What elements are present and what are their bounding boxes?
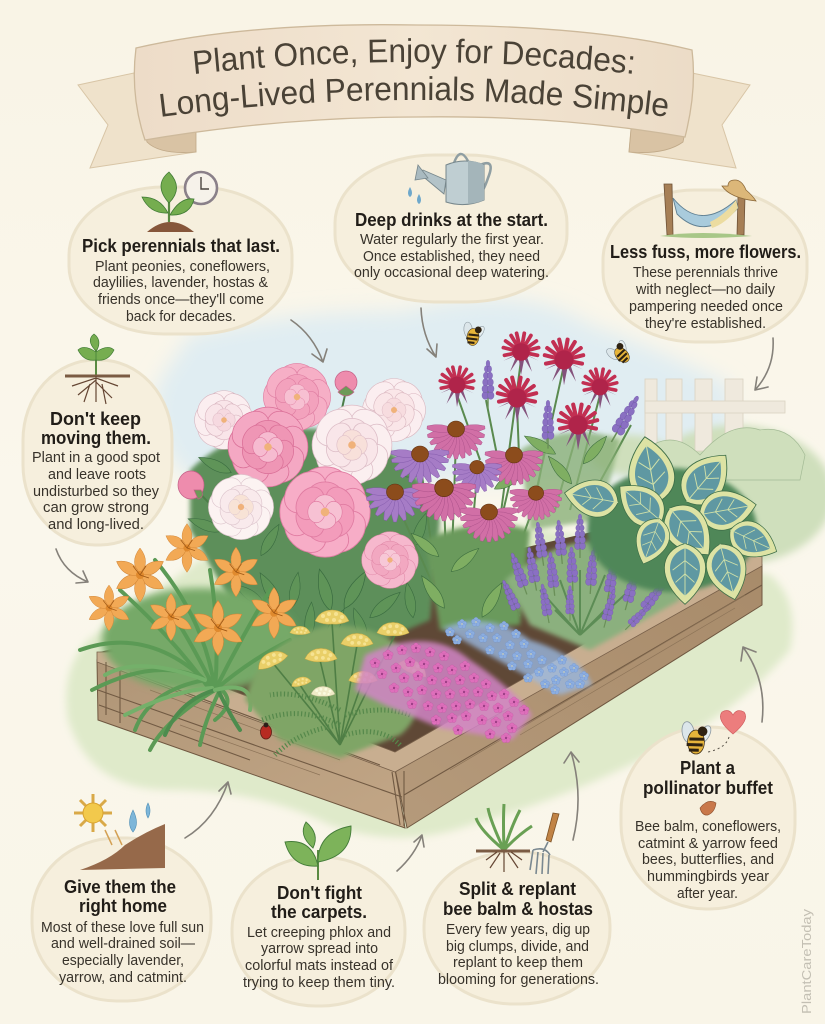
text: don't keep moving <box>32 409 160 533</box>
grass patch <box>66 520 792 838</box>
panel: pick perennials <box>69 172 292 334</box>
text: deep drinks: Once established, they need <box>363 249 540 265</box>
creeping phlox <box>355 641 532 743</box>
text: less fuss <box>610 242 801 332</box>
text: don't keep moving: and leave roots <box>48 467 146 483</box>
right plank face <box>395 565 762 828</box>
text: don't fight the carpets: colorful mats instead of <box>245 958 394 974</box>
peony buds <box>178 371 357 499</box>
ribbon folds <box>145 118 685 153</box>
text: don't fight the carpets: the carpets. <box>271 902 367 922</box>
peonies <box>178 361 428 591</box>
soil <box>100 530 760 762</box>
text: don't keep moving: moving them. <box>41 428 151 448</box>
wash: bush <box>590 425 825 565</box>
text: pollinator body: after year. <box>677 886 738 902</box>
ladybug <box>260 723 272 739</box>
text: pollinator heading: Plant a <box>680 758 736 778</box>
panel: right home <box>32 794 211 1001</box>
text: don't keep moving: undisturbed so they <box>33 484 160 500</box>
panel: split and replant <box>424 804 610 1004</box>
arrow: less fuss to hosta <box>755 338 773 390</box>
text: right home: especially lavender, <box>62 953 184 969</box>
title text <box>160 38 668 120</box>
peony foliage <box>186 395 440 650</box>
arrow: right home to bed <box>185 782 231 838</box>
text: pollinator body: Bee balm, coneflowers, <box>635 819 781 835</box>
text: don't keep moving: Don't keep <box>50 409 141 429</box>
panel: deep drinks <box>335 154 567 302</box>
text: deep drinks: Deep drinks at the start. <box>355 210 548 230</box>
text: pick perennials: Pick perennials that last. <box>82 236 280 256</box>
daylily foliage <box>80 560 298 750</box>
daylilies <box>87 524 299 656</box>
icon: small butterfly <box>700 801 716 815</box>
text: don't fight the carpets: Don't fight <box>277 883 362 903</box>
text: pollinator body <box>635 819 781 902</box>
text: pick perennials <box>82 236 280 325</box>
hosta <box>561 433 784 605</box>
arrow: carpets to bed <box>397 835 424 871</box>
coneflowers <box>366 421 562 542</box>
bee balm <box>440 333 617 450</box>
text: pick perennials: daylilies, lavender, hostas & <box>93 275 268 291</box>
arrow: pick perennials to peonies <box>291 320 327 362</box>
panel: don't keep moving <box>23 334 172 545</box>
purple catmint spikes <box>482 360 644 449</box>
text: less fuss: Less fuss, more flowers. <box>610 242 801 262</box>
text: don't fight the carpets: trying to keep them tiny. <box>243 975 395 991</box>
left plank face <box>97 660 405 828</box>
text: pick perennials: back for decades. <box>126 309 236 325</box>
icon: sun, water and soil <box>74 794 165 870</box>
text: split and replant: blooming for generations. <box>438 972 599 988</box>
text: don't keep moving: Plant in a good spot <box>32 450 160 466</box>
text: don't fight the carpets: Let creeping phlox and <box>247 925 391 941</box>
plank seams <box>98 585 762 826</box>
panel: pollinator buffet <box>621 711 795 909</box>
right ribbon tail <box>629 73 750 168</box>
text: don't fight the carpets <box>243 883 395 991</box>
text: right home: yarrow, and catmint. <box>59 970 187 986</box>
text: deep drinks: Water regularly the first year. <box>360 232 544 248</box>
text: less fuss: they're established. <box>645 316 766 332</box>
yarrow <box>254 610 430 696</box>
text: right home <box>41 877 204 986</box>
text: don't keep moving: and long-lived. <box>48 517 144 533</box>
coneflower and bee balm foliage <box>408 432 620 630</box>
lavender <box>499 514 680 650</box>
title banner <box>77 24 751 168</box>
text: deep drinks <box>354 210 549 281</box>
text: split and replant: Every few years, dig up <box>446 922 590 938</box>
watercolor sky wash <box>154 299 735 480</box>
panel: less fuss <box>603 180 807 342</box>
text: pick perennials: friends once—they'll come <box>98 292 264 308</box>
text: pollinator heading <box>643 758 773 798</box>
rim top <box>97 552 762 772</box>
title text: Long-Lived Perennials Made Simple <box>160 76 668 120</box>
arrow: pollinator to bed <box>741 647 763 722</box>
text: don't fight the carpets: yarrow spread into <box>261 941 378 957</box>
text: pollinator heading: pollinator buffet <box>643 778 773 798</box>
icon: green leaves <box>285 822 351 880</box>
left ribbon tail <box>78 73 196 168</box>
watermark: PlantCareToday <box>799 908 814 1014</box>
text: less fuss: pampering needed once <box>629 299 783 315</box>
icon: seedling with roots <box>65 334 130 404</box>
text: split and replant: big clumps, divide, and <box>446 939 589 955</box>
text: pollinator body: catmint & yarrow feed <box>638 836 778 852</box>
icon: grass clump and garden fork <box>476 804 559 874</box>
text: right home: right home <box>79 896 167 916</box>
icon: watering can <box>408 154 491 205</box>
text: split and replant: replant to keep them <box>453 955 583 971</box>
text: right home: Most of these love full sun <box>41 920 204 936</box>
text: less fuss: These perennials thrive <box>633 265 778 281</box>
arrow: don't keep moving to daylilies <box>56 549 88 583</box>
fence <box>645 379 785 451</box>
title text: Plant Once, Enjoy for Decades: <box>194 38 634 74</box>
icon: seedling and clock <box>142 172 217 232</box>
icon: hammock and hat <box>660 180 756 238</box>
text: don't keep moving: can grow strong <box>43 500 149 516</box>
text: deep drinks: only occasional deep watering. <box>354 265 549 281</box>
arrow: deep drinks to coneflowers <box>421 308 437 357</box>
creeping blue flowers <box>442 617 592 695</box>
yarrow foliage <box>245 622 425 758</box>
arrow: split and replant to bed <box>564 752 579 840</box>
raised wooden bed <box>97 530 762 828</box>
text: right home: Give them the <box>64 877 176 897</box>
text: split and replant <box>438 879 599 988</box>
bee near bee balm right <box>603 338 635 371</box>
text: pollinator body: bees, butterflies, and <box>642 852 774 868</box>
ribbon body <box>134 25 693 140</box>
bee near bee balm left <box>456 319 487 349</box>
text: less fuss: with neglect—no daily <box>635 282 776 298</box>
coneflower and bee balm stems <box>395 360 631 620</box>
text: split and replant: Split & replant <box>459 879 576 899</box>
background bush and fence <box>590 379 825 565</box>
text: right home: and well-drained soil— <box>51 936 195 952</box>
text: pick perennials: Plant peonies, coneflowers, <box>95 259 270 275</box>
panel: don't fight the carpets <box>232 822 405 1006</box>
text: split and replant: bee balm & hostas <box>443 899 593 919</box>
text: pollinator body: hummingbirds year <box>647 869 769 885</box>
icon: bee and heart <box>673 711 746 759</box>
